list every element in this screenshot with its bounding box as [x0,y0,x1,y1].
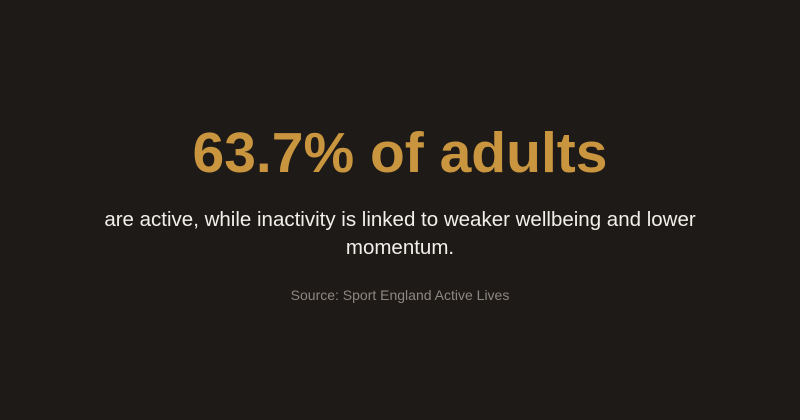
headline stat: 63.7% of adults [193,121,607,185]
description text: are active, while inactivity is linked to weaker wellbeing and lower momentum. [104,208,696,259]
source: Source: Sport England Active Lives [291,287,509,303]
